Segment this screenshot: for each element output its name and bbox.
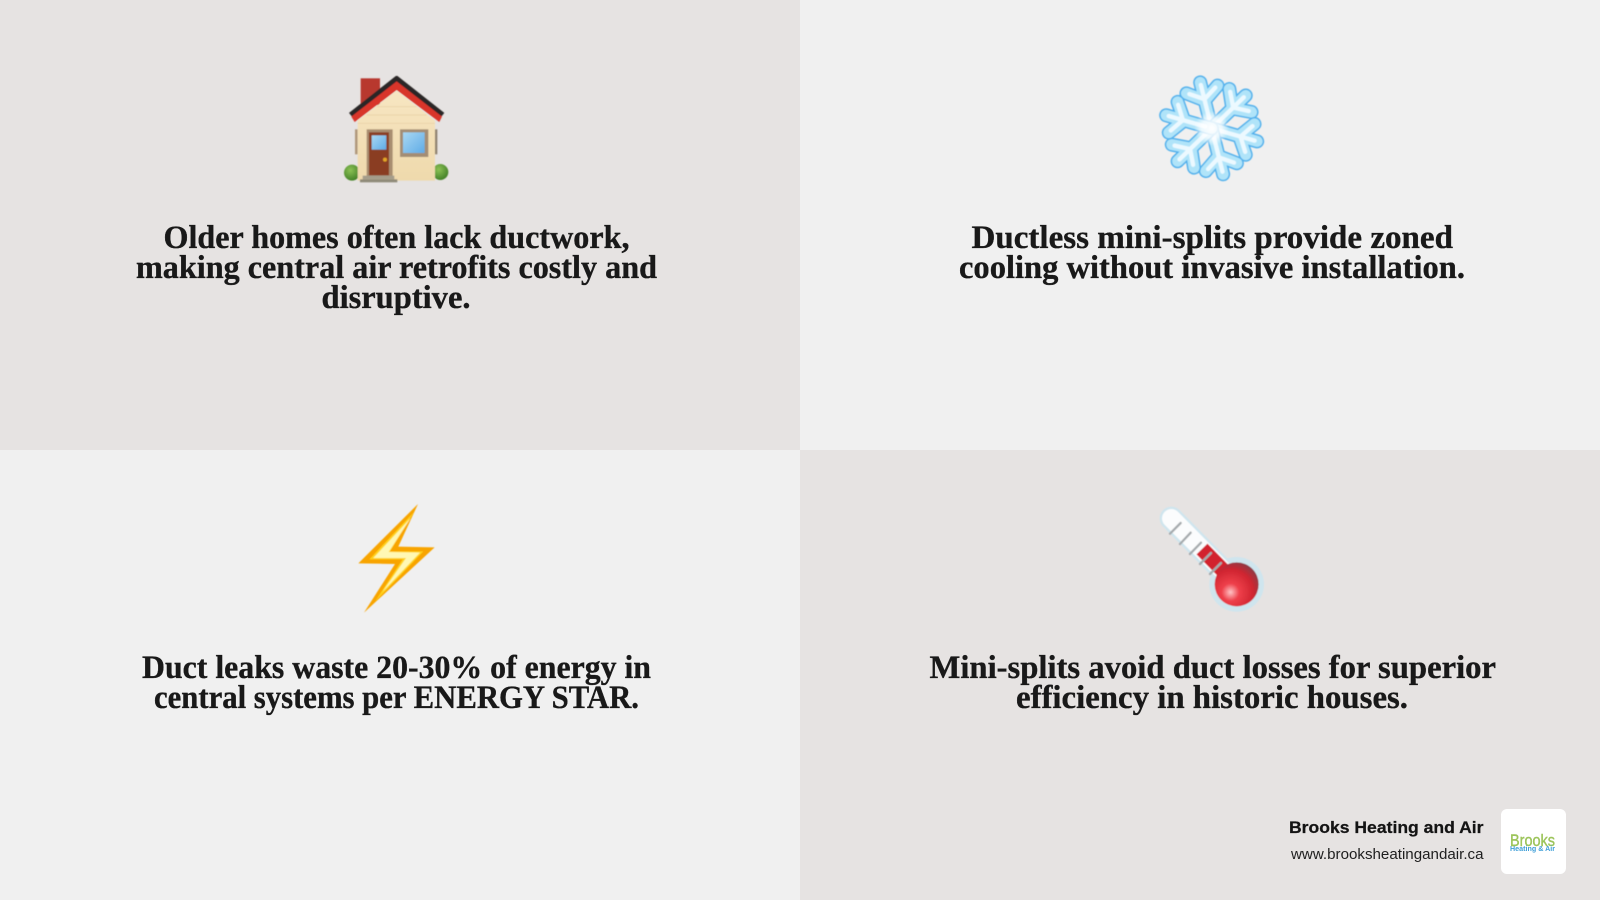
heading: older homes: Older homes often lack ductwork, (164, 220, 630, 256)
logo: Heating & Air (1510, 846, 1555, 853)
heading: older homes: disruptive. (322, 280, 470, 316)
panel: ductless mini-splits (800, 0, 1600, 450)
heading: older homes (136, 220, 657, 316)
icon: lightning bolt (358, 504, 435, 613)
heading: mini-split efficiency: Mini-splits avoid duct losses for superior (930, 650, 1496, 686)
panel: older homes (0, 0, 800, 450)
heading: ductless mini-splits: Ductless mini-splits provide zoned (972, 220, 1453, 256)
panel: duct leaks (0, 450, 800, 900)
heading: duct leaks (142, 650, 651, 716)
panel background (800, 0, 1600, 450)
panel background (800, 450, 1600, 900)
heading: mini-split efficiency: efficiency in historic houses. (1016, 680, 1408, 716)
icon: thermometer (1170, 518, 1264, 612)
website url: www.brooksheatingandair.ca (1290, 847, 1484, 863)
heading: mini-split efficiency (930, 650, 1496, 716)
panel background (0, 0, 800, 450)
logo: Brooks (1510, 831, 1555, 850)
icon: snowflake (1162, 79, 1262, 178)
brand footer (1289, 809, 1566, 874)
heading: duct leaks: central systems per ENERGY STAR. (154, 680, 639, 716)
icon: house (344, 78, 448, 182)
heading: duct leaks: Duct leaks waste 20-30% of energy in (142, 650, 651, 686)
heading: ductless mini-splits (959, 220, 1465, 286)
company name: Brooks Heating and Air (1289, 818, 1484, 837)
panel background (0, 450, 800, 900)
logo (1501, 809, 1566, 874)
heading: older homes: making central air retrofits costly and (136, 250, 657, 286)
panel: mini-split efficiency (800, 450, 1600, 900)
heading: ductless mini-splits: cooling without invasive installation. (959, 250, 1465, 286)
